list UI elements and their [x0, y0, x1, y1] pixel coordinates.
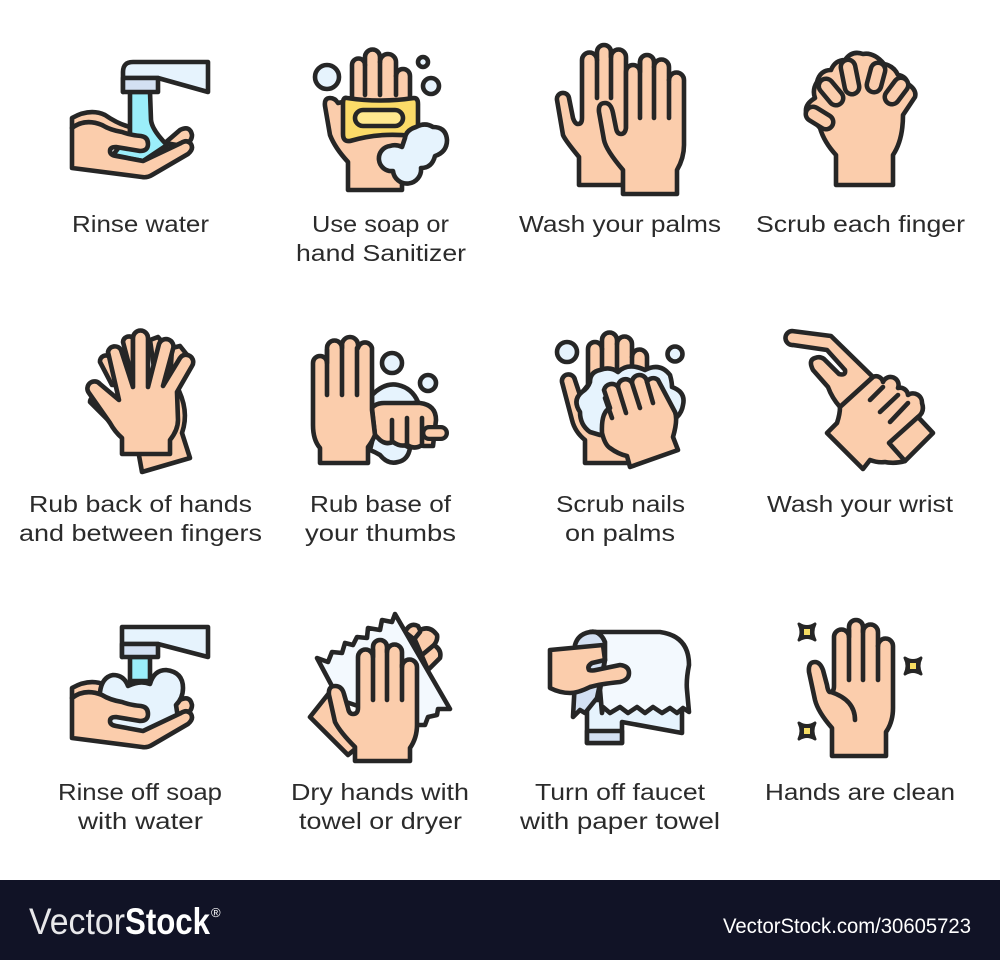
- label: scrub nails on palms: [556, 491, 685, 546]
- label: scrub nails on palms: Scrub nails: [556, 491, 685, 517]
- label: use soap or hand sanitizer: Use soap or: [312, 211, 449, 237]
- logo: VectorStock: Stock: [125, 901, 210, 942]
- icon: two overlapping open hands: [557, 45, 684, 194]
- icon: hand pulling paper towel roll: [550, 632, 689, 743]
- image id: VectorStock.com/30605723: [723, 915, 971, 938]
- label: dry hands with towel or dryer: [291, 779, 469, 834]
- label: dry hands with towel or dryer: towel or dryer: [299, 808, 462, 834]
- label: rinse off soap with water: [58, 779, 222, 834]
- step: hands are clean: [765, 620, 955, 805]
- step: wash your wrist: [767, 331, 954, 517]
- icon: hand with soap bar and foam: [315, 50, 447, 190]
- label: rub back of hands: Rub back of hands: [29, 491, 252, 517]
- label: wash your palms: Wash your palms: [519, 211, 721, 237]
- footer bar: [0, 880, 1000, 960]
- label: scrub nails on palms: on palms: [565, 520, 675, 546]
- step: rinse water: [72, 62, 209, 237]
- label: turn off faucet with paper towel: Turn off faucet: [535, 779, 706, 805]
- icon: faucet and foamy hand: [72, 627, 208, 747]
- icon: nails on foamy palm: [557, 333, 684, 467]
- label: rinse off soap with water: Rinse off soap: [58, 779, 222, 805]
- label: rub base of your thumbs: your thumbs: [305, 520, 456, 546]
- logo: VectorStock: ®: [211, 905, 221, 920]
- icon: hand gripping wrist: [785, 331, 933, 469]
- label: rinse water: Rinse water: [72, 211, 209, 237]
- label: rub base of your thumbs: [305, 491, 456, 546]
- icon: interlocked fingers: [806, 53, 915, 185]
- label: hands are clean: Hands are clean: [765, 779, 955, 805]
- label: rub back of hands: [19, 491, 262, 546]
- step: dry hands: [291, 614, 469, 834]
- icon: faucet and hand under water: [72, 62, 208, 177]
- step: wash your palms: [519, 45, 721, 237]
- label: turn off faucet with paper towel: [519, 779, 720, 834]
- step: rub back of hands: [19, 331, 262, 546]
- label: dry hands with towel or dryer: Dry hands with: [291, 779, 469, 805]
- label: rub back of hands: and between fingers: [19, 520, 262, 546]
- label: wash your wrist: Wash your wrist: [767, 491, 954, 517]
- label: use soap or hand sanitizer: hand Sanitizer: [296, 240, 466, 266]
- step: scrub each finger: [756, 53, 965, 237]
- icon: fist around thumb with foam: [313, 337, 441, 463]
- label: rub base of your thumbs: Rub base of: [310, 491, 452, 517]
- label: turn off faucet with paper towel: with paper towel: [519, 808, 720, 834]
- label: use soap or hand sanitizer: [296, 211, 466, 266]
- label: scrub each finger: Scrub each finger: [756, 211, 965, 237]
- step: rinse off soap: [58, 627, 222, 834]
- logo: VectorStock: [29, 901, 221, 942]
- step: use soap or sanitizer: [296, 50, 466, 266]
- icon: clean hand with sparkles: [799, 620, 921, 756]
- label: rinse off soap with water: with water: [77, 808, 203, 834]
- step: rub base of thumbs: [305, 337, 456, 546]
- step: scrub nails on palms: [556, 333, 685, 546]
- step: turn off faucet: [519, 632, 720, 834]
- logo: VectorStock: Vector: [29, 901, 125, 942]
- icon: hand over back of hand: [87, 331, 193, 472]
- icon: hand holding paper towel: [310, 614, 450, 761]
